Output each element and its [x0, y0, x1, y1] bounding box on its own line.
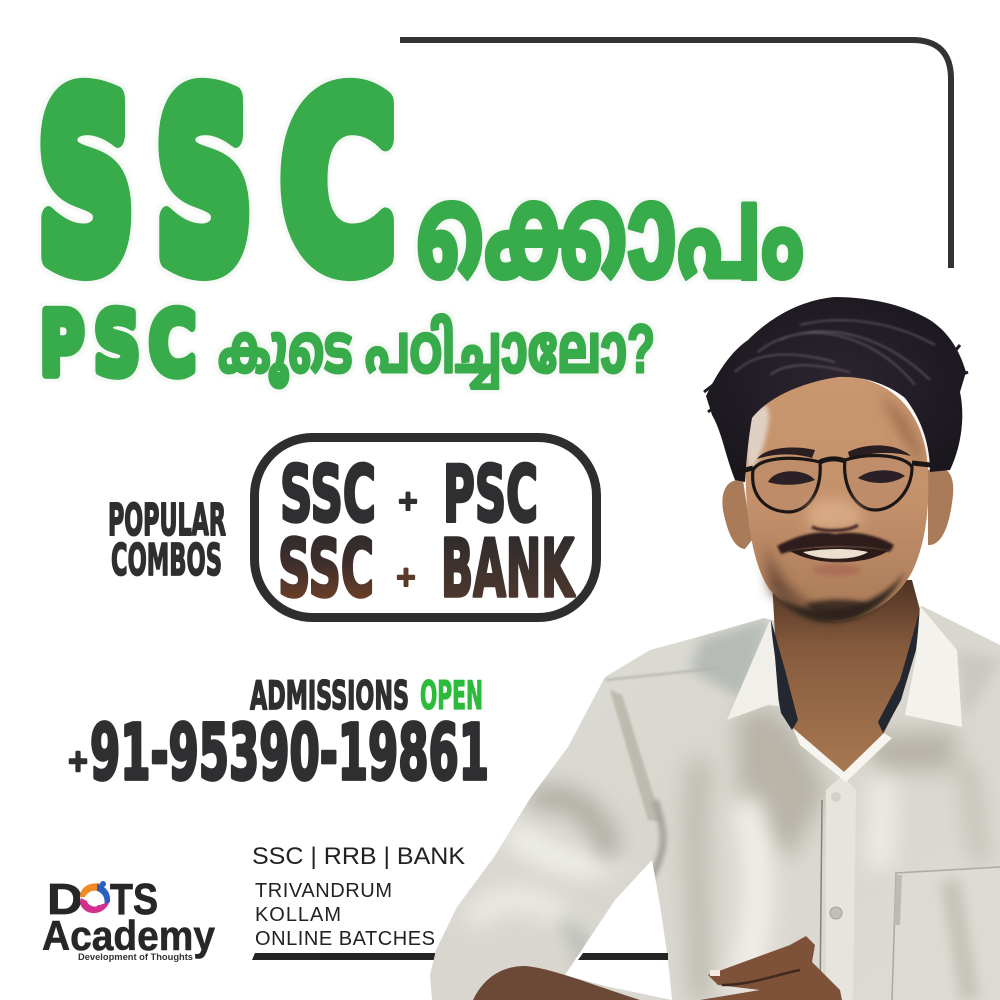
forearm	[473, 966, 640, 1000]
eyes	[768, 470, 905, 485]
logo: DOTS Academy: Development of Thoughts	[78, 952, 193, 962]
hand	[700, 936, 842, 1000]
phone number: +	[67, 744, 89, 779]
shirt pocket	[893, 867, 1000, 1000]
headline: SSC with Malayalam word: C	[281, 48, 395, 322]
shirt	[430, 606, 1000, 1000]
locations text: KOLLAM	[255, 904, 341, 926]
combo line: SSC + BANK: +	[395, 560, 417, 593]
combo line: SSC + BANK	[278, 523, 576, 615]
neck	[772, 580, 920, 772]
admissions open: ADMISSIONS	[250, 674, 409, 719]
phone number: 91-95390-19861	[90, 708, 489, 798]
headline: PSC with Malayalam phrase: S	[94, 293, 140, 395]
label: popular combos: COMBOS	[111, 536, 222, 586]
combo line: SSC + PSC: PSC	[443, 448, 538, 540]
admissions open	[250, 674, 483, 719]
headline: SSC with Malayalam word: ക്കൊപ്പം	[416, 159, 804, 320]
face	[745, 376, 928, 622]
ears	[722, 468, 953, 549]
headline: PSC with Malayalam phrase: C	[149, 293, 196, 395]
logo: DOTS Academy	[42, 875, 216, 962]
combo line: SSC + PSC: SSC	[280, 448, 376, 540]
headline: PSC with Malayalam phrase: P	[40, 293, 84, 395]
logo: DOTS Academy: TS	[110, 875, 158, 924]
combo line: SSC + PSC: +	[397, 484, 419, 517]
collar right	[905, 606, 962, 727]
collar left	[727, 620, 779, 720]
label: popular combos: POPULAR	[108, 496, 226, 546]
nose	[806, 498, 862, 531]
bottom rule	[252, 953, 670, 960]
person: student photo illustration	[430, 297, 1000, 1000]
hair	[704, 297, 968, 482]
headline: PSC with Malayalam phrase: കൂടെ പഠിച്ചാലോ?	[218, 311, 655, 391]
eyebrows	[757, 445, 911, 459]
mustache and smile	[777, 532, 894, 576]
headline: SSC with Malayalam word: S	[156, 48, 252, 322]
inner collar	[771, 606, 921, 782]
logo: DOTS Academy: Academy	[42, 912, 216, 959]
logo: DOTS Academy: D	[47, 875, 83, 924]
combo line: SSC + BANK: SSC	[278, 523, 374, 615]
locations text: ONLINE BATCHES	[255, 928, 435, 950]
icon: dots logo mark	[80, 881, 110, 913]
frame line: top right corner	[400, 40, 951, 268]
locations text: TRIVANDRUM	[255, 880, 392, 902]
headline: SSC with Malayalam word: S	[38, 48, 134, 322]
panel: combos box	[254, 438, 596, 618]
course list: SSC | RRB | BANK	[252, 843, 465, 870]
headline: SSC with Malayalam word	[38, 76, 805, 283]
glasses	[737, 456, 931, 512]
shirt placket and button	[826, 776, 856, 1000]
headline: PSC with Malayalam phrase	[40, 302, 656, 392]
admissions open: OPEN	[420, 674, 483, 719]
label: popular combos	[108, 496, 226, 586]
combo line: SSC + PSC	[280, 448, 538, 540]
locations text	[255, 880, 435, 950]
white gap under arm	[565, 860, 672, 1000]
combo line: SSC + BANK: BANK	[441, 523, 576, 615]
